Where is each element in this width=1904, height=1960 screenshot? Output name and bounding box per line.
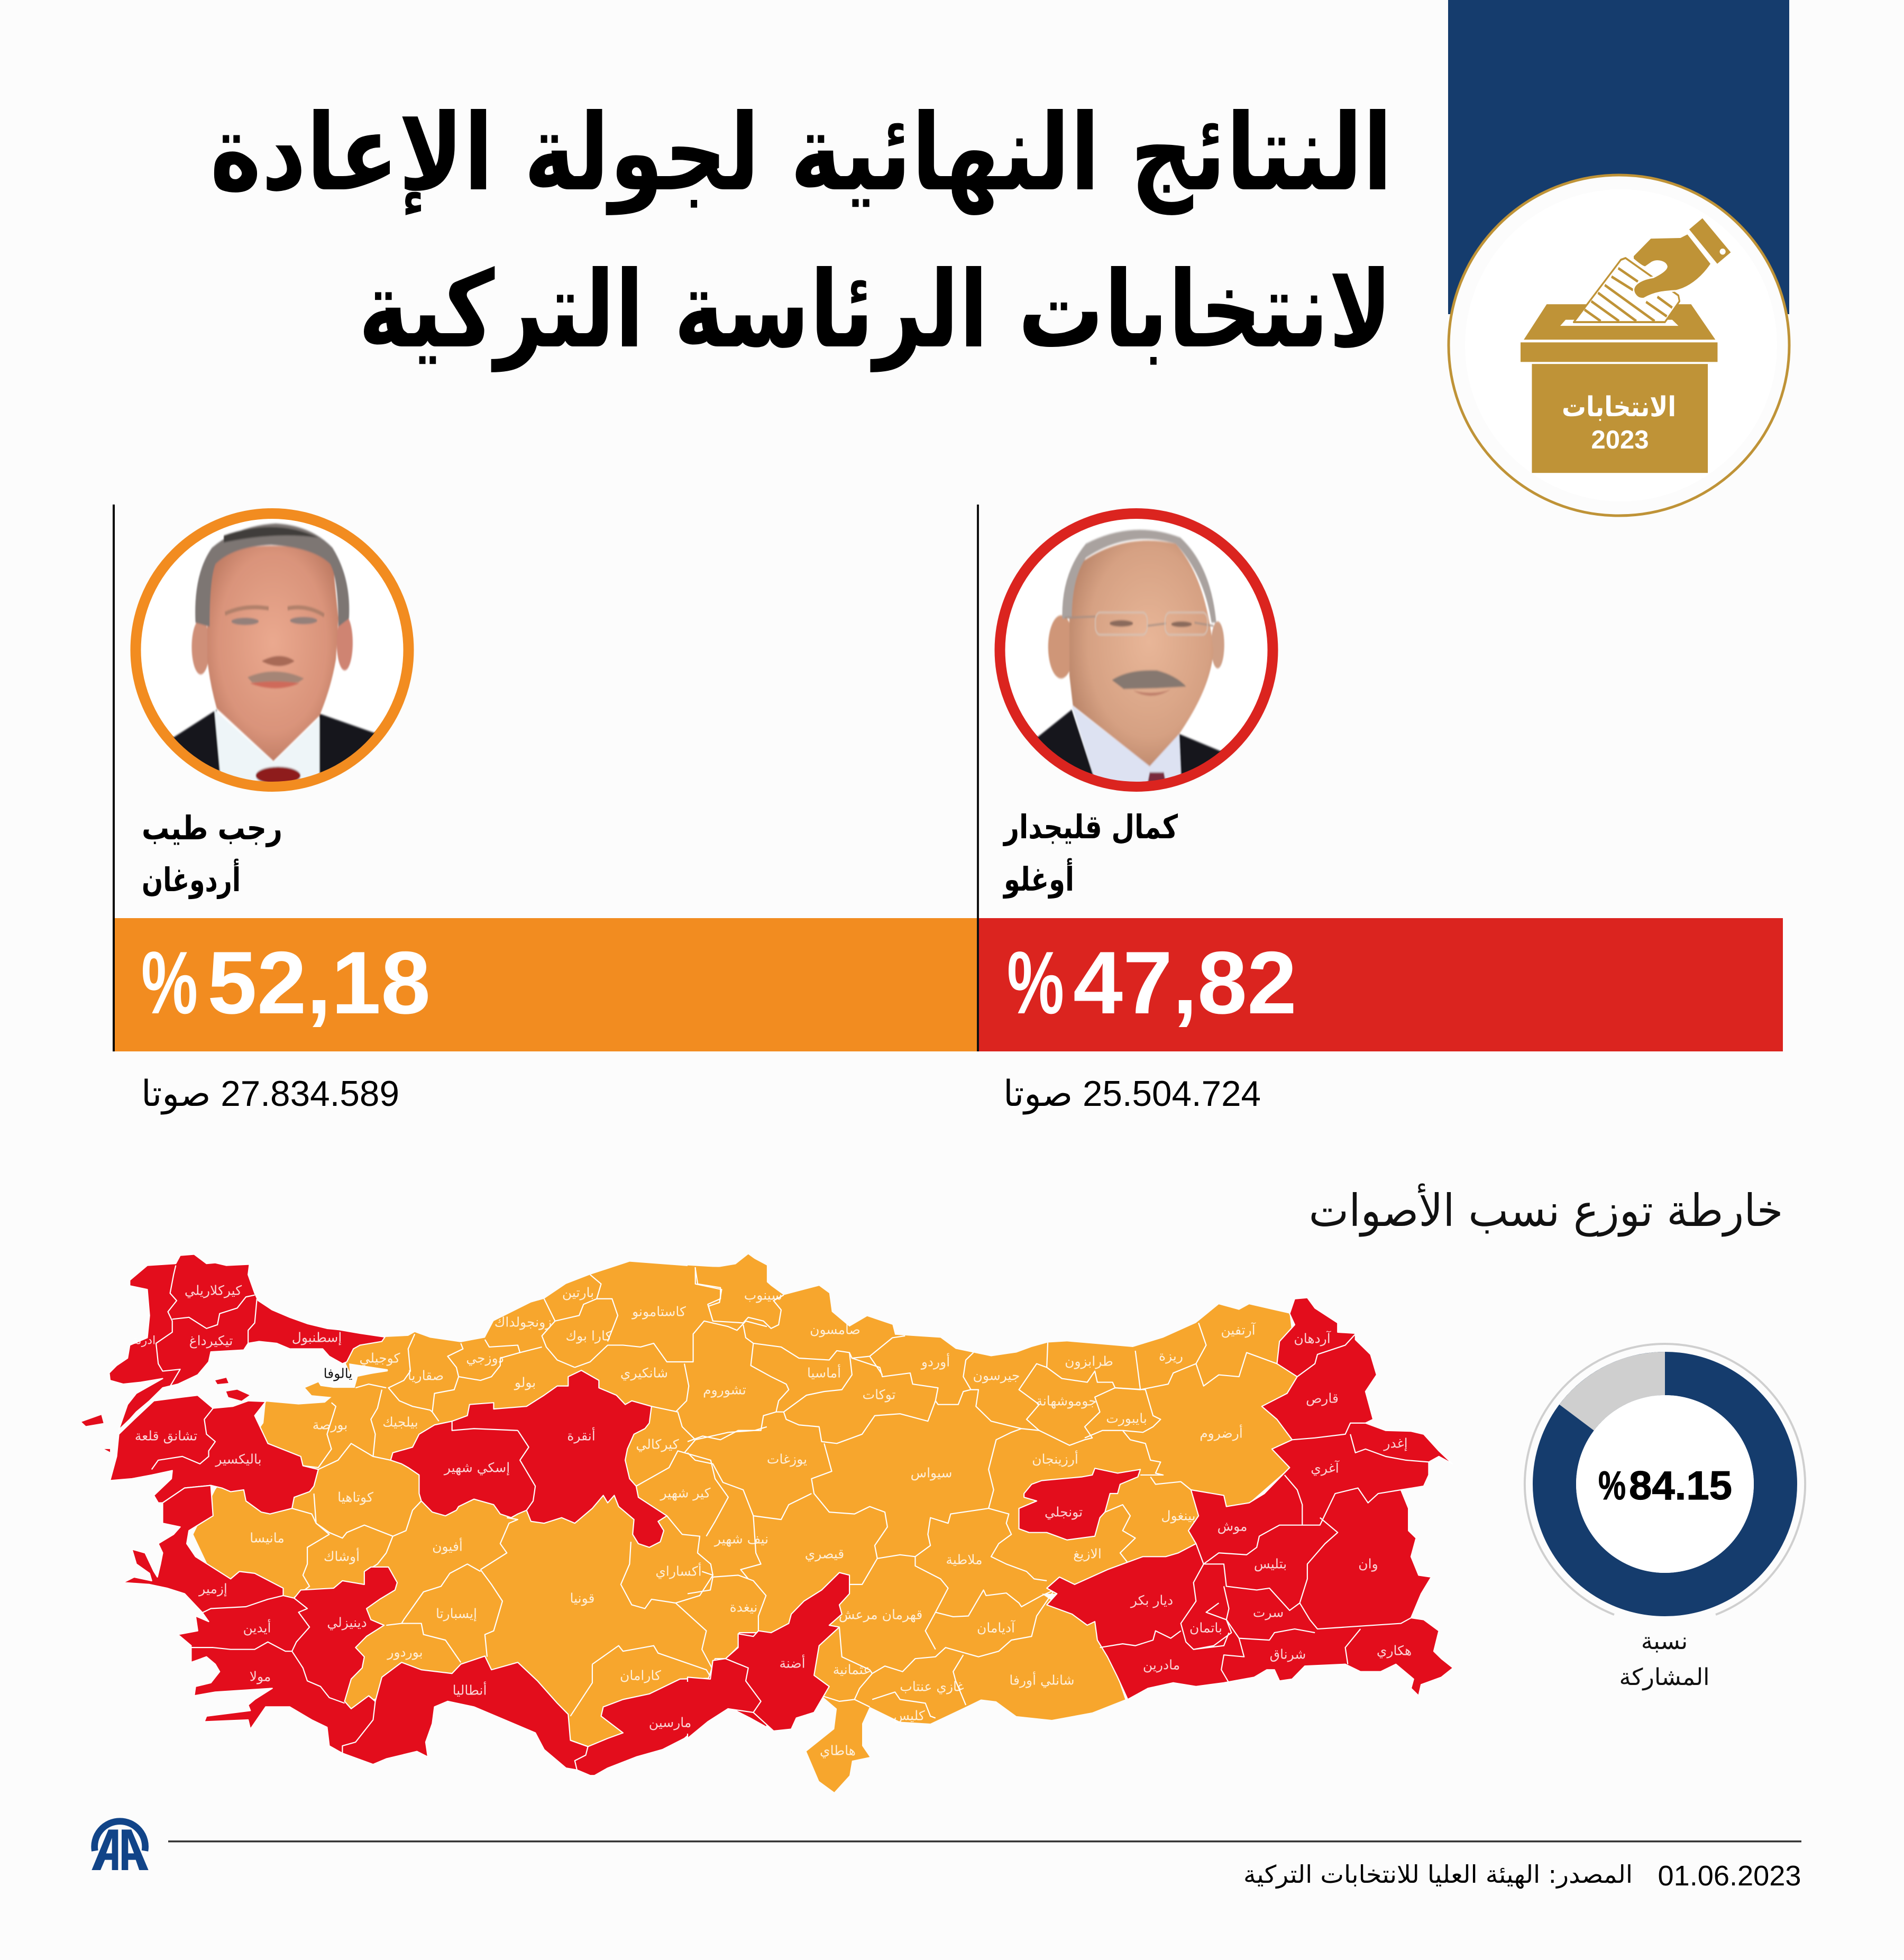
province labels: ادرنة [132,1334,155,1348]
title [210,91,1393,372]
emblem year: 2023 [1591,426,1649,454]
province labels: أرضروم [1200,1424,1243,1442]
province labels: إغدر [1383,1435,1408,1451]
province labels: بوردور [386,1645,423,1661]
province labels: قونيا [570,1591,594,1606]
province labels: شانلي أورفا [1009,1671,1075,1688]
icon: ballot box with hand [1521,218,1731,473]
province labels: كيركالي [636,1436,679,1452]
vote share: 52,18 [207,933,431,1032]
province labels: أكساراي [655,1562,702,1579]
province labels: بايبورت [1106,1411,1147,1426]
province labels: بينغول [1161,1508,1196,1523]
province labels: آغري [1311,1460,1340,1476]
province labels: مولا [250,1669,271,1684]
vote share: % [1007,933,1064,1032]
portrait: Kilicdaroglu [1000,514,1273,789]
turnout label: المشاركة [1619,1664,1709,1691]
gulf of Izmit [349,1363,388,1377]
province labels: قيصري [805,1546,844,1561]
panel: Erdogan result [113,505,978,1115]
source and date [1243,1860,1801,1892]
province labels: كير شهير [659,1485,711,1501]
province labels [132,1283,1412,1758]
title: لانتخابات الرئاسة التركية [359,249,1392,372]
province labels: تيكيرداغ [189,1333,233,1349]
province labels: مارسين [649,1715,691,1730]
province labels: عثمانية [833,1662,871,1678]
province labels: قهرمان مرعش [839,1607,922,1623]
province labels: وان [1358,1556,1378,1572]
map heading: خارطة توزع نسب الأصوات [1308,1183,1783,1237]
source and date: المصدر: الهيئة العليا للانتخابات التركية [1243,1860,1633,1889]
province labels: أوشاك [324,1547,360,1564]
election emblem [1449,175,1789,516]
vote count: 25.504.724 صوتا [1003,1074,1261,1115]
turnout donut chart [1525,1344,1805,1691]
province labels: قارص [1306,1391,1339,1406]
province labels: كيركلاريلي [185,1283,242,1298]
emblem label: الانتخابات [1562,391,1676,423]
province labels: باتمان [1189,1620,1222,1635]
province labels: كوتاهيا [337,1489,373,1505]
province labels: أضنة [779,1654,805,1671]
province labels: زونجولداك [495,1315,552,1331]
province labels: موش [1218,1519,1247,1534]
province labels: أماسيا [807,1363,841,1380]
source and date: 01.06.2023 [1658,1860,1801,1892]
province labels: جوموشهانة [1036,1393,1097,1409]
province labels: أنقرة [567,1427,596,1444]
province labels: بورصة [313,1417,347,1432]
province labels: إيسبارتا [436,1606,477,1622]
divider line [977,505,979,1051]
province labels: مانيسا [250,1531,285,1545]
panel: Kilicdaroglu result [977,505,1783,1115]
province labels: صامسون [810,1322,861,1337]
province labels: شانكيري [620,1366,668,1380]
province labels: هكاري [1377,1643,1412,1659]
logo: Anadolu Agency [91,1821,149,1870]
orange result bar [114,918,978,1051]
province labels: مادرين [1143,1657,1180,1672]
province labels: نيغدة [730,1599,757,1615]
turnout value: 84.15 [1629,1463,1732,1508]
province labels: يالوفا [324,1366,352,1381]
province labels: كوجيلي [360,1351,400,1366]
province labels: أيدين [243,1618,271,1635]
province labels: باليكسير [214,1451,262,1467]
province labels: دوزجي [466,1351,504,1367]
province labels: سرت [1253,1605,1284,1620]
candidate name [1003,808,1178,899]
province labels: نيف شهير [713,1532,768,1547]
province labels: هاطاي [820,1743,856,1758]
candidate name: أردوغان [142,858,241,899]
province labels: دينيزلي [327,1615,367,1630]
province labels: توكات [863,1387,896,1403]
province labels: إزمير [198,1581,227,1597]
province labels: كاستامونو [631,1304,686,1319]
province labels: شرناق [1270,1647,1306,1662]
map of Turkey [81,1254,1453,1792]
candidate name: أوغلو [1003,858,1074,899]
candidate name [142,809,282,899]
province labels: بيلجيك [382,1414,418,1430]
province labels: بارتين [562,1285,594,1300]
province labels: أفيون [432,1537,463,1554]
title: النتائج النهائية لجولة الإعادة [210,91,1393,215]
province labels: صقاريا [408,1368,444,1384]
divider line [113,505,115,1051]
province labels: طرابزون [1065,1354,1113,1370]
vote share: 47,82 [1073,933,1297,1032]
province labels: بولو [514,1375,536,1390]
province labels: يوزغات [767,1451,807,1467]
province labels: كليس [893,1708,925,1723]
vote share: % [141,933,198,1032]
turnout label: نسبة [1641,1628,1688,1655]
province labels: ملاطية [946,1552,983,1568]
vote count: 27.834.589 صوتا [141,1074,399,1115]
province borders [292,1267,1277,1718]
province labels: ديار بكر [1130,1593,1173,1608]
red provinces [81,1254,1453,1775]
province labels: بتليس [1254,1556,1287,1572]
seam patches [765,1637,768,1721]
province labels: تشانق قلعة [135,1428,197,1444]
red result bar [978,918,1783,1051]
province labels: غازي عنتاب [900,1679,964,1695]
province labels: سيواس [911,1465,952,1481]
province labels: آديامان [977,1619,1015,1635]
province labels: ريزة [1159,1349,1183,1363]
footer rule [168,1840,1801,1843]
province labels: أوردو [920,1353,950,1370]
province labels: آرتفين [1221,1322,1256,1338]
province labels: تونجلي [1045,1504,1083,1520]
candidate name: كمال قليجدار [1003,808,1178,846]
turnout label [1619,1628,1709,1691]
portrait: Erdogan [135,514,408,789]
province labels: آردهان [1294,1331,1331,1347]
province labels: كارا بوك [566,1329,612,1343]
province labels: جيرسون [973,1368,1020,1384]
province labels: سينوب [744,1287,782,1303]
province labels: إسطنبول [292,1330,342,1345]
province labels: الازيغ [1073,1546,1102,1562]
province labels: إسكي شهير [443,1460,510,1476]
province labels: تشوروم [703,1382,746,1398]
orange provinces [194,1254,1297,1792]
navy header block [1448,0,1789,314]
candidate name: رجب طيب [142,809,282,847]
turnout value: % [1598,1463,1626,1508]
province labels: أنطاليا [453,1681,487,1698]
province labels: كارامان [620,1668,661,1683]
province labels: أرزينجان [1032,1450,1078,1467]
